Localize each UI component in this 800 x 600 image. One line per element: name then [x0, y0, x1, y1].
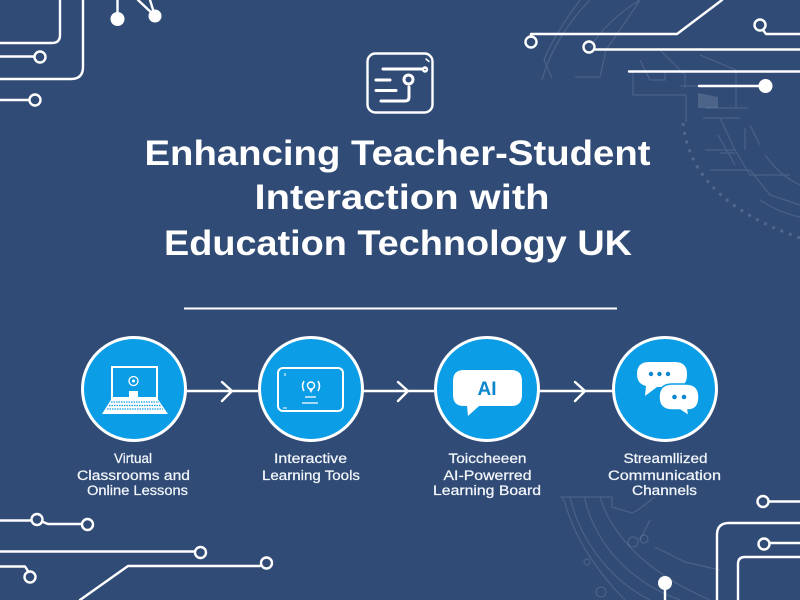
step 4: communication channels [608, 338, 721, 498]
icon badge: AI speech bubble: AI [478, 379, 496, 400]
label: Toiccheeen [448, 451, 526, 466]
step 3: AI learning board [433, 338, 541, 498]
label: Online Lessons [87, 483, 188, 498]
label: Channels [632, 483, 697, 498]
label: Learning Tools [262, 468, 360, 483]
icon badge: chat bubbles [614, 338, 716, 440]
circuit traces: top right [526, 0, 800, 93]
step 1: virtual classrooms [77, 338, 190, 498]
label: AI-Powerred [444, 468, 532, 483]
title: Education Technology UK [164, 224, 632, 263]
title: Interaction with [254, 178, 550, 217]
icon badge: laptop [82, 338, 186, 440]
label: Streamllized [624, 451, 708, 466]
label [262, 451, 360, 483]
divider [184, 308, 617, 310]
title [144, 134, 651, 263]
icon badge: AI speech bubble [436, 338, 538, 440]
label: Communication [608, 468, 721, 483]
circuit traces: top left [0, 0, 162, 106]
arrow: step 2 to step 3 [364, 382, 434, 401]
label: Learning Board [433, 483, 541, 498]
circuit traces: bottom right [658, 496, 800, 600]
label: Classrooms and [77, 468, 190, 483]
arrow: step 1 to step 2 [187, 382, 258, 401]
icon badge: interactive tablet [260, 338, 362, 440]
label [608, 451, 721, 498]
label: Virtual [114, 451, 152, 466]
label [77, 451, 190, 498]
label: Interactive [274, 451, 347, 466]
label [433, 451, 541, 498]
title: Enhancing Teacher-Student [144, 134, 651, 173]
step 2: interactive tools [260, 338, 362, 483]
icon: circuit document [368, 54, 432, 112]
arrow: step 3 to step 4 [540, 382, 612, 401]
circuit traces: bottom left [0, 514, 272, 600]
